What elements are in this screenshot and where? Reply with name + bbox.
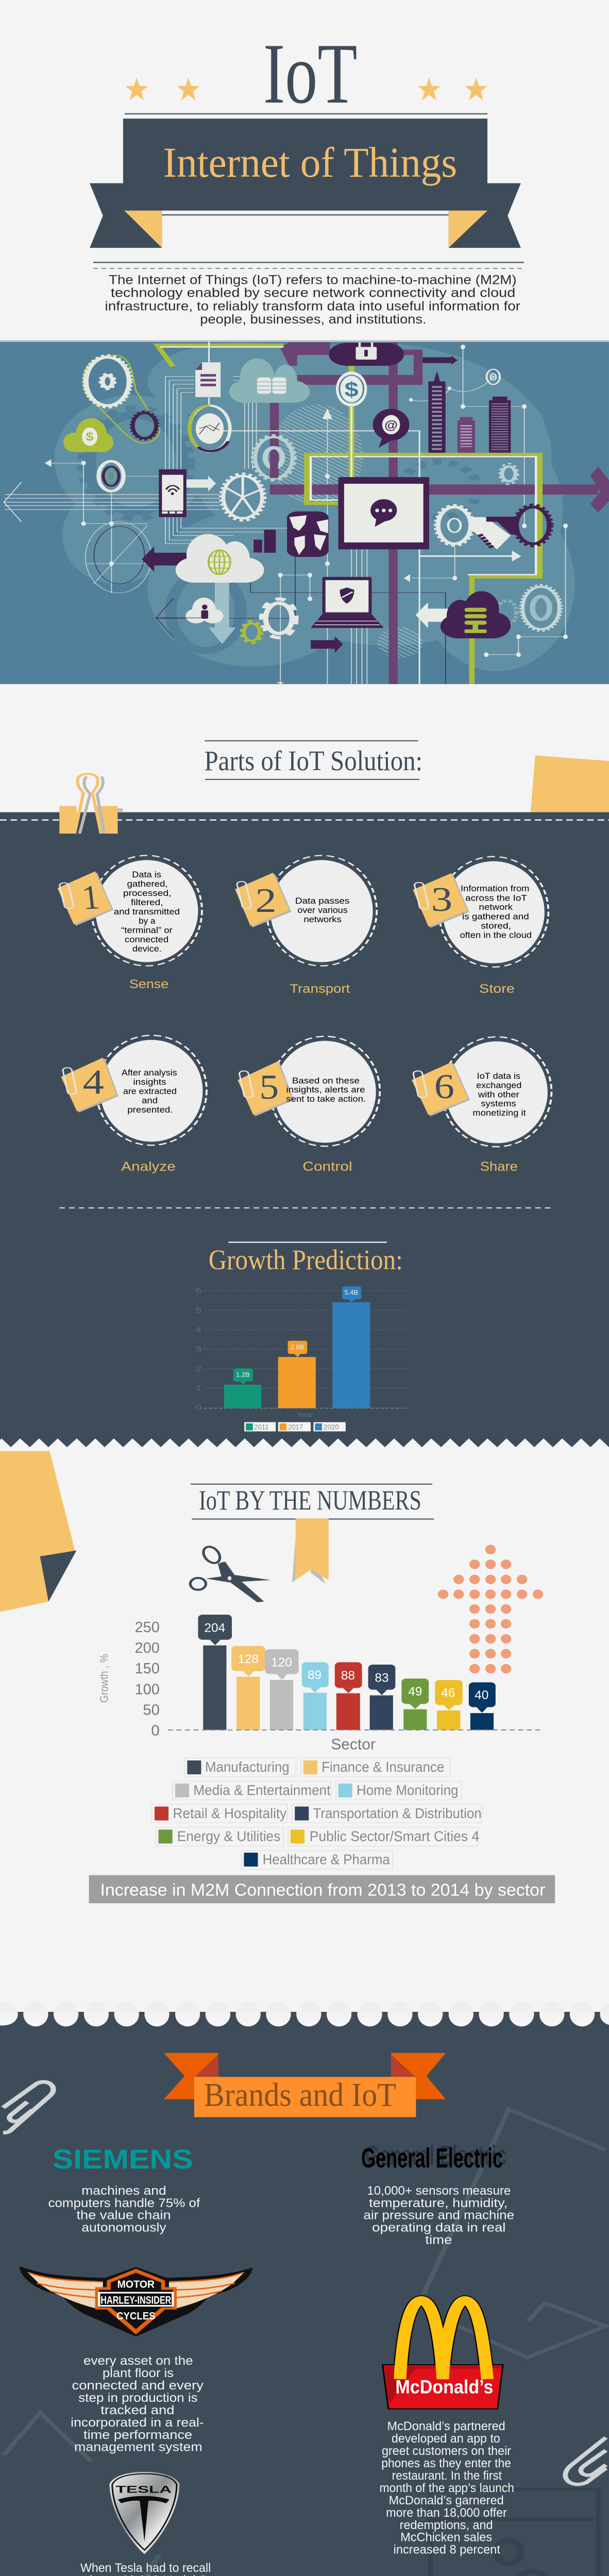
header section (90, 25, 524, 326)
section: IoT by the numbers (0, 1451, 555, 1903)
McDonald's description: increased 8 percent (394, 2543, 500, 2556)
chart legend: sectors: Healthcare & Pharma (263, 1852, 390, 1867)
step 4: Analyze: After analysis (122, 1067, 177, 1077)
McDonald's description: month of the app’s launch (379, 2481, 514, 2495)
McDonald's description: restaurant. In the first (392, 2469, 502, 2482)
gear with belt (83, 355, 159, 443)
step 1: Sense: filtered, (131, 897, 163, 907)
brand: General Electric: time (425, 2233, 452, 2247)
Harley-Davidson description: connected and every (72, 2379, 204, 2392)
bar chart: growth prediction (195, 1286, 407, 1431)
Harley-Davidson description: time performance (83, 2428, 192, 2442)
brand: General Electric: 10,000+ sensors measure (367, 2184, 511, 2197)
small cloud with person (185, 598, 223, 623)
lime dollar cloud: $ (86, 430, 94, 444)
document icon (195, 362, 221, 397)
city buildings (428, 371, 511, 453)
bar chart: M2M growth by sector: 120 (271, 1655, 292, 1669)
Harley-Davidson description: tracked and (100, 2403, 174, 2417)
step 3: Store: often in the cloud (460, 930, 532, 940)
bar chart: M2M growth by sector: Sector (331, 1736, 376, 1753)
step 3: Store: Information from (461, 884, 529, 893)
chart legend: sectors: Public Sector/Smart Cities 4 (310, 1828, 479, 1844)
step 4: Analyze: and (142, 1095, 158, 1105)
spoked wheel gear (221, 473, 264, 520)
step 6: Share: exchanged (476, 1080, 521, 1090)
hero illustration: connected devices (0, 340, 609, 684)
step 6: Share: monetizing it (472, 1108, 526, 1117)
Harley-Davidson description (71, 2354, 204, 2454)
bar chart: growth prediction: Year (297, 1411, 313, 1419)
icon: four stars (125, 77, 487, 100)
gears and handshake (436, 505, 551, 549)
thin network lines (46, 347, 566, 684)
step 2: Transport: Transport (290, 981, 350, 995)
ribbon heading: Brands and IoT: Brands and IoT (204, 2076, 396, 2113)
step 4: Analyze: are extracted (123, 1086, 177, 1096)
step 2: Transport: networks (303, 914, 342, 924)
step 4: Analyze: insights (133, 1077, 166, 1087)
at-sign speech bubble: @ (384, 418, 398, 432)
intro paragraph: people, businesses, and institutions. (200, 312, 427, 326)
cloud database (229, 359, 310, 403)
icon: bookmark (292, 1518, 329, 1584)
step 2: Transport: Data passes (295, 896, 349, 906)
bar chart: growth prediction: 2.6B (291, 1344, 304, 1351)
step 3: Store: stored, (481, 921, 511, 930)
chart legend: sectors: Energy & Utilities (177, 1828, 280, 1844)
analytics circle (190, 405, 230, 452)
bar chart: M2M growth by sector: 89 (308, 1668, 322, 1682)
arrow: white right (187, 476, 216, 492)
arrow: right dark (422, 355, 458, 365)
bar chart: M2M growth by sector: 50 (143, 1702, 160, 1718)
icon: dotted up arrow (438, 1545, 543, 1673)
lime dollar cloud (63, 418, 113, 452)
bar chart: M2M growth by sector: 40 (475, 1688, 488, 1702)
icon: scissors (190, 1545, 270, 1602)
step 3: Store: is gathered and (462, 911, 529, 921)
brand: Siemens: machines and (81, 2184, 166, 2197)
chart legend: sectors: Manufacturing (205, 1759, 290, 1775)
logo: Harley wings: CYCLES (116, 2311, 156, 2322)
Harley-Davidson description: plant floor is (103, 2366, 174, 2380)
brand: General Electric (361, 2140, 514, 2247)
dark server cloud (441, 591, 511, 638)
target icons (98, 369, 500, 491)
heading: Parts of IoT Solution: Parts of IoT Solution: (204, 745, 422, 776)
step 4: Analyze (61, 1036, 207, 1174)
McDonald's description: McDonald’s garnered (389, 2494, 504, 2507)
step 6: Share (412, 1037, 551, 1174)
step 1: Sense: 1 (80, 878, 102, 917)
logo: Harley wings: HARLEY-INSIDER (100, 2294, 171, 2306)
bar chart: growth prediction: 4 (195, 1326, 202, 1334)
step 1: Sense: connected (125, 935, 168, 944)
ribbon heading: Brands and IoT (164, 2053, 446, 2117)
icon: paperclip (3, 2082, 53, 2132)
bar chart: M2M growth by sector: 200 (135, 1640, 160, 1656)
bar chart: M2M growth by sector: 88 (341, 1669, 355, 1682)
purple connector lines (270, 342, 609, 684)
step 3: Store (413, 857, 548, 995)
bar chart: growth prediction: 0 (195, 1404, 201, 1412)
background gears (81, 408, 478, 651)
smartphone (159, 469, 187, 517)
brand: General Electric: operating data in real (372, 2221, 505, 2234)
brand: Siemens: autonomously (81, 2221, 166, 2234)
lock pill (329, 342, 404, 366)
step 6: Share: with other (478, 1089, 519, 1099)
step 1: Sense: processed, (123, 888, 171, 898)
chart legend: sectors: Media & Entertainment (193, 1782, 331, 1798)
folded yellow paper (0, 1451, 76, 1612)
icon: paperclip right (565, 2437, 606, 2484)
thin arrow chevron lower-left (156, 598, 206, 637)
bar chart: growth prediction: 2 (195, 1365, 201, 1373)
arrow: pale down (209, 583, 236, 644)
arrow: dark left (142, 546, 190, 572)
brand: Siemens (48, 2144, 200, 2234)
chart legend: sectors: Finance & Insurance (322, 1759, 444, 1775)
McDonald's description: phones as they enter the (381, 2456, 511, 2470)
bar chart: M2M growth by sector: 128 (238, 1652, 259, 1666)
McDonald's description: greet customers on their (382, 2444, 511, 2458)
Harley-Davidson description: management system (74, 2441, 202, 2454)
central monitor with chat bubble (339, 477, 429, 549)
small office buildings (253, 530, 276, 553)
step 2: Transport (235, 855, 377, 995)
bar chart: growth prediction: 6 (195, 1287, 201, 1295)
step 6: Share: Share (480, 1159, 518, 1174)
step 2: Transport: over various (297, 905, 348, 915)
step 6: Share: systems (481, 1098, 516, 1109)
bar chart: M2M growth by sector: 83 (375, 1671, 389, 1684)
logo: Harley wings (20, 2266, 252, 2336)
caption bar (89, 1875, 555, 1903)
step 1: Sense: Sense (129, 977, 168, 991)
Harley-Davidson description: step in production is (78, 2391, 198, 2404)
bar chart: M2M growth by sector: 204 (204, 1621, 225, 1634)
step 1: Sense: and transmitted (114, 907, 180, 917)
step 4: Analyze: 4 (83, 1063, 104, 1101)
lime data route (157, 345, 540, 684)
heading: IoT by the numbers: IoT BY THE NUMBERS (199, 1485, 421, 1516)
bar chart: M2M growth by sector (98, 1615, 542, 1869)
laptop with shield (311, 577, 384, 628)
arrow: wire left (4, 482, 219, 522)
step 1: Sense: gathered, (127, 879, 168, 889)
chart legend: sectors: Retail & Hospitality (173, 1805, 286, 1821)
bar chart: growth prediction: 5.4B (345, 1289, 358, 1296)
logo: Harley wings: MOTOR (117, 2279, 155, 2290)
Harley-Davidson description: incorporated in a real- (71, 2416, 204, 2429)
chart legend: sectors (152, 1758, 482, 1869)
icon: binder clip (59, 774, 123, 834)
step 3: Store: across the IoT (465, 893, 527, 903)
bar chart: growth prediction: 1.2B (236, 1371, 250, 1379)
brands section (3, 2053, 514, 2336)
step 3: Store: 3 (431, 880, 452, 919)
logo: Tesla (110, 2472, 179, 2554)
bar chart: M2M growth by sector: Growth , % (98, 1654, 111, 1703)
dollar badge: $ (345, 378, 359, 401)
dark panel: parts and growth (0, 812, 609, 1447)
chart legend: 2011 (254, 1423, 269, 1431)
brand: General Electric: air pressure and machine (364, 2209, 514, 2222)
bar chart: M2M growth by sector: 46 (441, 1686, 455, 1700)
bar chart: growth prediction: 1 (195, 1384, 201, 1393)
scalloped edge (0, 2002, 609, 2026)
logo: McDonald's: McDonald’s (395, 2376, 493, 2397)
step 1: Sense: by a (139, 916, 156, 926)
faint background line shapes (4, 2109, 606, 2576)
McDonald's description: more than 18,000 offer (386, 2506, 507, 2519)
at-sign speech bubble (373, 409, 410, 448)
chart legend: 2020 (324, 1423, 339, 1431)
logo: Tesla: TESLA (116, 2484, 172, 2495)
Tesla description (80, 2561, 211, 2576)
brand: General Electric: temperature, humidity, (369, 2196, 508, 2210)
gears lower (242, 464, 561, 643)
chart legend: sectors: Transportation & Distribution (313, 1805, 482, 1821)
McDonald's description: McDonald’s partnered (387, 2419, 505, 2433)
brand: Siemens: SIEMENS (53, 2144, 193, 2175)
step 5: Control: Control (302, 1159, 352, 1174)
Harley-Davidson description: every asset on the (83, 2354, 193, 2367)
step 5: Control (238, 1037, 380, 1174)
parts of solution, second row and growth chart (59, 1036, 551, 1431)
step 1: Sense: Data is (132, 870, 161, 879)
McDonald's description: developed an app to (392, 2432, 500, 2445)
step 5: Control: sent to take action. (286, 1094, 366, 1104)
brand: Siemens: computers handle 75% of (48, 2196, 200, 2210)
step 5: Control: insights, alerts are (286, 1084, 365, 1094)
Tesla description: When Tesla had to recall (80, 2561, 211, 2574)
arrow: white left toward server cloud (416, 602, 456, 628)
globe icon (287, 512, 329, 557)
dollar badge (336, 371, 367, 406)
heading: Growth Prediction: Growth Prediction: (209, 1245, 403, 1276)
brand: Siemens: the value chain (76, 2209, 171, 2222)
step 4: Analyze: presented. (127, 1105, 173, 1114)
logo: McDonald's (382, 2300, 503, 2409)
large white cloud with globe (176, 534, 264, 583)
McDonald's description (379, 2419, 514, 2556)
step 4: Analyze: Analyze (121, 1159, 176, 1174)
header section: IoT (263, 25, 357, 122)
arrow: dark right lower (311, 636, 343, 653)
parts of solution, first row (0, 755, 609, 995)
bar chart: M2M growth by sector: 0 (151, 1723, 160, 1739)
arrow: thin white right (419, 550, 521, 562)
step 1: Sense: device. (132, 944, 162, 954)
bar chart: M2M growth by sector: 49 (408, 1685, 422, 1698)
brands section, lower part (45, 2300, 606, 2576)
chart legend (244, 1422, 346, 1431)
step 3: Store: Store (479, 981, 515, 995)
chart legend: 2017 (288, 1423, 303, 1431)
bar chart: growth prediction: 3 (195, 1345, 201, 1354)
step 3: Store: network (479, 902, 513, 912)
bar chart: M2M growth by sector: 250 (135, 1619, 160, 1636)
step 1: Sense (58, 855, 202, 991)
intro paragraph (105, 273, 520, 326)
McDonald's description: McChicken sales (400, 2531, 492, 2544)
gear center (253, 435, 295, 480)
bar chart: growth prediction: 5 (195, 1307, 201, 1315)
yellow paper corner (531, 755, 609, 812)
bar chart: M2M growth by sector: 100 (135, 1682, 160, 1698)
bar chart: M2M growth by sector: 150 (135, 1660, 160, 1677)
step 2: Transport: 2 (255, 882, 277, 920)
chart legend: sectors: Home Monitoring (357, 1782, 458, 1798)
step 1: Sense: “terminal” or (121, 925, 173, 935)
step 6: Share: 6 (434, 1067, 454, 1106)
dark panel: brands (0, 2012, 609, 2576)
step 5: Control: Based on these (292, 1076, 360, 1086)
ribbon banner with subtitle (90, 118, 521, 248)
McDonald's description: redemptions, and (400, 2518, 493, 2532)
step 5: Control: 5 (260, 1068, 279, 1107)
step 6: Share: IoT data is (477, 1071, 520, 1081)
